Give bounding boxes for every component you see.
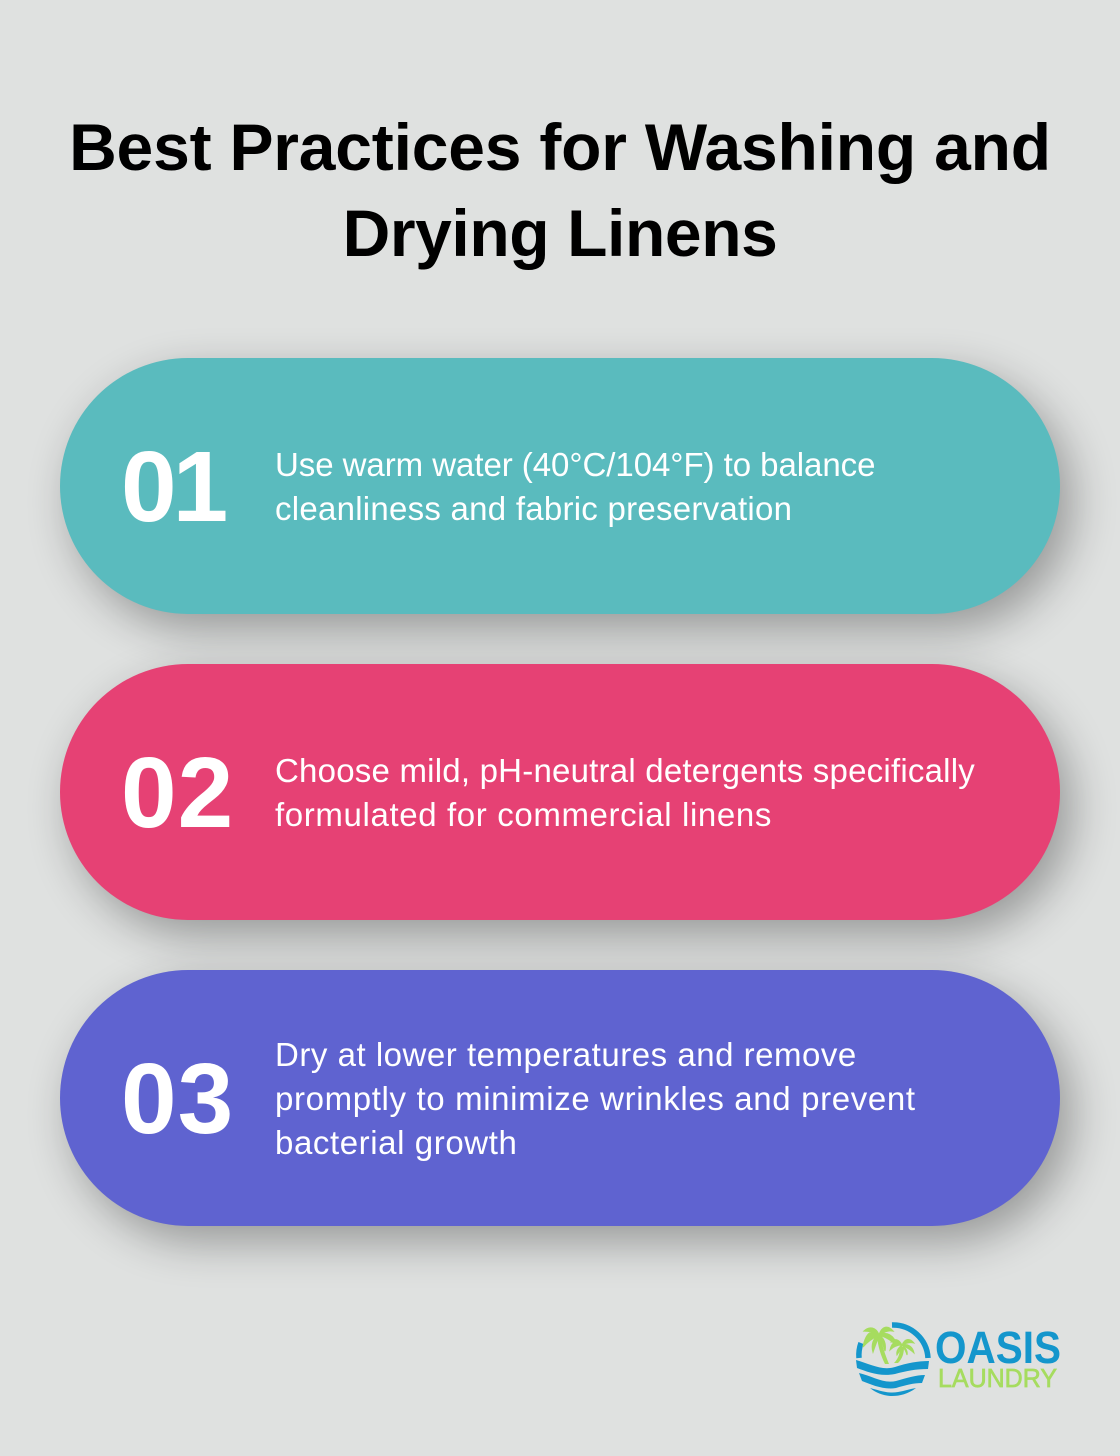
panel: step 02 xyxy=(60,664,1060,920)
step text 01 xyxy=(275,446,875,527)
step number 03: 03 xyxy=(121,1043,234,1155)
logo wordmark xyxy=(935,1322,1061,1393)
logo: Oasis Laundry xyxy=(856,1322,1061,1396)
step text 03: Dry at lower temperatures and remove xyxy=(275,1036,857,1073)
panel: step 01 xyxy=(60,358,1060,614)
step text 02 xyxy=(275,752,975,833)
title: Drying Linens xyxy=(343,196,777,270)
step text 01: Use warm water (40°C/104°F) to balance xyxy=(275,446,875,483)
step number 01: 01 xyxy=(121,431,224,543)
title: Best Practices for Washing and xyxy=(69,110,1051,184)
step text 03: promptly to minimize wrinkles and prevent xyxy=(275,1080,916,1117)
step text 02: formulated for commercial linens xyxy=(275,796,772,833)
step text 01: cleanliness and fabric preservation xyxy=(275,490,792,527)
step number 02: 02 xyxy=(121,737,234,849)
step text 03: bacterial growth xyxy=(275,1124,517,1161)
panel: step 03 xyxy=(60,970,1060,1226)
step text 03 xyxy=(275,1036,916,1161)
title xyxy=(69,110,1051,270)
step text 02: Choose mild, pH-neutral detergents specifically xyxy=(275,752,975,789)
icon: ring, waves and palm trees xyxy=(856,1325,929,1396)
logo wordmark: LAUNDRY xyxy=(938,1363,1057,1393)
